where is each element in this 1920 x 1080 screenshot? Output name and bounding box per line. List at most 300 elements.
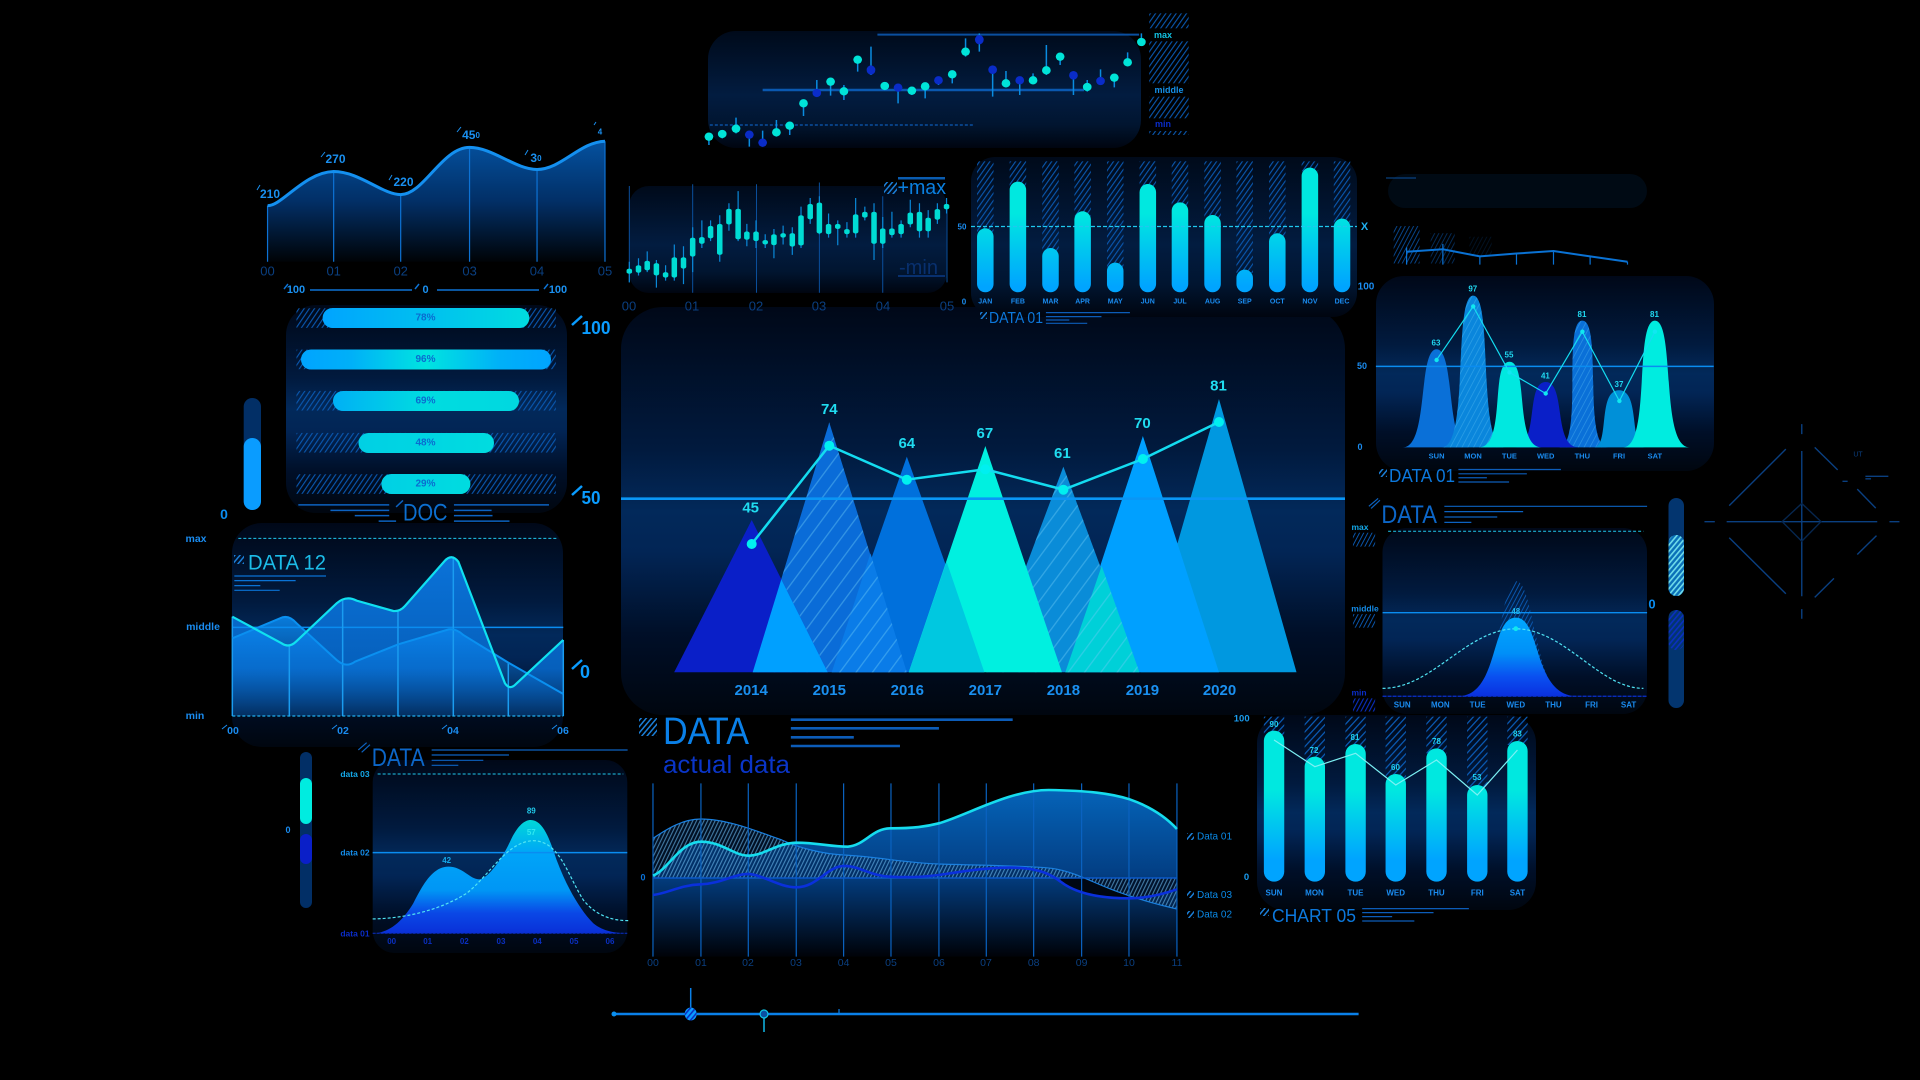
- bar 96%: [301, 350, 551, 370]
- values: 70: [1134, 415, 1151, 432]
- overlap 2015-2016: [832, 553, 907, 672]
- month labels: NOV: [1302, 298, 1318, 306]
- scale -100 0 100: [287, 284, 567, 296]
- panel: monthly bar chart: [958, 157, 1375, 327]
- years: 2020: [1203, 682, 1236, 699]
- peak WED: [1514, 382, 1579, 447]
- panel background: [971, 157, 1357, 317]
- values: 89: [527, 806, 536, 816]
- dashed curve: [373, 841, 628, 921]
- crosshair: [1704, 424, 1899, 619]
- month labels: SEP: [1238, 298, 1252, 306]
- day labels: SAT: [1621, 700, 1636, 710]
- peak THU hatching: [1558, 321, 1608, 447]
- month labels: JUN: [1141, 298, 1155, 306]
- values: [742, 378, 1227, 516]
- candle bodies: [627, 203, 949, 278]
- zero: 0: [640, 873, 646, 883]
- y labels: middle: [186, 621, 220, 633]
- base line: [1383, 695, 1647, 697]
- x axis labels: 01: [685, 298, 699, 314]
- day labels: THU: [1428, 888, 1445, 898]
- day labels: WED: [1506, 700, 1525, 710]
- day labels: SAT: [1510, 888, 1525, 898]
- heading lines: [358, 743, 628, 765]
- solid bell: [1458, 618, 1577, 696]
- level line: [1383, 612, 1647, 614]
- percentages: 48%: [415, 438, 436, 448]
- heading lines: [1362, 909, 1469, 921]
- overlap hatching: [832, 553, 907, 672]
- zero: 0: [285, 825, 291, 835]
- y labels: max: [1351, 522, 1369, 532]
- scale ticks: [572, 316, 582, 495]
- month labels: AUG: [1205, 298, 1221, 306]
- heading lines: [298, 500, 549, 521]
- values: 53: [1473, 773, 1482, 782]
- data points: [747, 417, 1224, 549]
- day labels: WED: [1386, 888, 1405, 898]
- values: 72: [1310, 746, 1319, 755]
- blue series: [232, 617, 563, 694]
- heading: DATA 12: DATA 12: [248, 552, 326, 574]
- grid verticals: [268, 141, 605, 262]
- values: 64: [898, 435, 916, 452]
- triangle 2020: [1140, 399, 1297, 672]
- x labels: 06: [557, 725, 569, 737]
- x labels: 07: [980, 957, 992, 969]
- years: 2015: [813, 682, 846, 699]
- x labels: 01: [695, 957, 707, 969]
- overlap 2018-2019: [1065, 566, 1139, 672]
- area fill: [268, 141, 605, 262]
- chart: smooth area line: [257, 122, 612, 296]
- outline data 02: [653, 819, 1177, 909]
- inner diamond: [1782, 503, 1821, 541]
- x labels: 03: [497, 937, 506, 946]
- top dashed: [1388, 530, 1643, 532]
- scale: 0: [1244, 872, 1249, 883]
- panel background: [373, 760, 627, 953]
- day labels: MON: [1464, 452, 1482, 460]
- right scale 100: 100: [582, 318, 610, 338]
- marker A: [685, 988, 697, 1020]
- panel background: [1382, 528, 1647, 714]
- hill chart: [358, 743, 628, 933]
- value labels: 210: [260, 187, 280, 201]
- scale -100 0 100: 100: [549, 284, 567, 296]
- x labels: [227, 725, 569, 737]
- value labels: 270: [326, 152, 346, 166]
- panel: bar chart 05: [1234, 714, 1536, 926]
- faint line chart: [1394, 226, 1627, 265]
- baseline: [232, 715, 563, 717]
- level line: [1376, 365, 1714, 367]
- hatching: [653, 819, 1177, 909]
- values: 60: [1391, 763, 1400, 772]
- panel: peaks chart: [1357, 276, 1714, 486]
- start dot: [612, 1012, 616, 1016]
- horizontal level: [621, 497, 1345, 500]
- x axis labels: 02: [393, 264, 408, 278]
- panel background: [621, 307, 1345, 715]
- right scale 50: 50: [582, 488, 600, 508]
- values: 61: [1054, 445, 1071, 462]
- x axis labels: 00: [622, 298, 636, 314]
- peak THU: [1558, 321, 1608, 447]
- gauge fill: [244, 438, 261, 510]
- data line: [1437, 306, 1655, 401]
- values: 90: [1270, 720, 1279, 729]
- values: 67: [977, 425, 993, 442]
- heading lines: [1046, 313, 1130, 323]
- axis values: [958, 221, 1375, 306]
- heading lines: [234, 576, 326, 590]
- curve: [268, 141, 605, 206]
- data points: [1434, 304, 1657, 403]
- dark blue candles: [745, 35, 1105, 147]
- x axis labels: 05: [598, 264, 612, 278]
- month labels: DEC: [1335, 298, 1349, 306]
- gauge zero: 0: [220, 506, 228, 522]
- day labels: TUE: [1348, 888, 1364, 898]
- value labels: 220: [394, 175, 414, 189]
- y labels: data 03: [340, 769, 370, 779]
- y labels: min: [1351, 688, 1367, 698]
- panel background: [1257, 715, 1536, 910]
- x labels: 11: [1172, 957, 1183, 969]
- triangle 2015: [753, 422, 907, 672]
- panel: dot candlestick chart: [705, 13, 1189, 148]
- peak SUN: [1403, 349, 1470, 447]
- years: 2019: [1126, 682, 1159, 699]
- axis values: 50: [958, 222, 967, 232]
- peak SAT: [1623, 321, 1690, 447]
- day labels: MON: [1305, 888, 1324, 898]
- x labels: 04: [533, 937, 542, 946]
- y labels: [185, 533, 220, 722]
- axis values: X: [1361, 221, 1369, 233]
- candle wicks: [629, 191, 947, 288]
- x labels: 08: [1028, 957, 1040, 969]
- value: 48: [1511, 607, 1521, 616]
- x axis labels: 00: [260, 264, 275, 278]
- x labels: [387, 937, 615, 946]
- day labels: FRI: [1585, 700, 1598, 710]
- x labels: 02: [460, 937, 469, 946]
- scale: 100: [1234, 714, 1250, 724]
- top dashed line: [378, 773, 623, 775]
- values: 97: [1468, 284, 1478, 294]
- values: 63: [1432, 338, 1441, 348]
- triangle 2016: [832, 457, 984, 672]
- hatched tracks: [1264, 717, 1528, 788]
- heading: DATA: DATA: [372, 744, 425, 772]
- values: [442, 806, 536, 865]
- month labels: JUL: [1173, 298, 1187, 306]
- day labels: THU: [1545, 700, 1562, 710]
- panel background: [708, 31, 1141, 148]
- scale -100 0 100: 100: [287, 284, 305, 296]
- bottom dashed line: [373, 932, 627, 934]
- month labels: MAR: [1043, 298, 1058, 306]
- day labels: FRI: [1471, 888, 1484, 898]
- value labels: 450: [462, 128, 480, 142]
- day labels: WED: [1537, 452, 1555, 460]
- short line: [1386, 177, 1416, 179]
- panel background: [286, 305, 567, 513]
- dark gap: [1061, 878, 1177, 898]
- month labels: [978, 298, 1349, 306]
- chart: DATA actual data: [639, 711, 1232, 969]
- hatched tracks: [977, 161, 1350, 273]
- hill: [373, 820, 627, 933]
- panel: area chart DATA 12: [185, 523, 590, 747]
- panel: hill chart DATA: [340, 743, 628, 953]
- faint empty panel: [1386, 174, 1647, 208]
- heading: DATA 01: DATA 01: [1389, 466, 1455, 486]
- left scale: [1357, 361, 1367, 452]
- zero: 0: [1648, 596, 1656, 612]
- x labels: 06: [933, 957, 945, 969]
- values: 42: [442, 856, 452, 865]
- line: [1407, 249, 1627, 262]
- cyan candles: [705, 38, 1146, 141]
- heading swatch: [980, 312, 987, 319]
- area under cyan line: [232, 557, 563, 716]
- legend swatches: [1187, 833, 1194, 918]
- legend: Data 02: [1197, 909, 1232, 921]
- bars and line: [1264, 717, 1528, 921]
- x labels: [647, 957, 1183, 969]
- heading: DATA 01: DATA 01: [989, 310, 1043, 327]
- bar 29%: [381, 474, 470, 494]
- x labels: 04: [447, 725, 459, 737]
- bars: [1264, 731, 1528, 882]
- track: [300, 752, 312, 908]
- label ticks: [222, 725, 557, 729]
- heading swatch: [639, 718, 657, 736]
- gauge: [244, 398, 261, 510]
- x axis labels: 03: [812, 298, 826, 314]
- area and series: [653, 720, 1177, 957]
- x labels: 06: [606, 937, 615, 946]
- hatched scale column: [1149, 13, 1189, 135]
- triangle 2019: [1065, 436, 1219, 672]
- min label: -min: [899, 257, 938, 279]
- legend: [1197, 831, 1232, 921]
- years: 2014: [735, 682, 769, 699]
- years: [735, 682, 1236, 699]
- values: [1270, 720, 1522, 782]
- cyan fill: [300, 778, 312, 824]
- percentages: 69%: [415, 396, 436, 406]
- x axis labels: 03: [462, 264, 477, 278]
- heading: DATA: DATA: [1381, 501, 1437, 529]
- marker B: [760, 1010, 768, 1032]
- month labels: OCT: [1270, 298, 1285, 306]
- years: 2016: [891, 682, 924, 699]
- heading swatch: [1260, 908, 1269, 916]
- x labels: 00: [387, 937, 397, 946]
- line: [1274, 740, 1517, 795]
- value labels: 4: [598, 128, 603, 136]
- radar target diagram: [1704, 424, 1899, 619]
- triangle 2015 hatching: [753, 422, 907, 672]
- heading lines: [1458, 470, 1561, 482]
- legend: Data 01: [1197, 831, 1232, 843]
- gauge lower: [1668, 610, 1684, 708]
- right zero: 0: [580, 662, 590, 682]
- legend: Data 03: [1197, 889, 1232, 901]
- grid verticals: [629, 183, 947, 293]
- values: 57: [527, 828, 536, 837]
- hatched swatches: [1394, 226, 1492, 264]
- values: 78: [1432, 737, 1441, 746]
- level line: [373, 852, 627, 854]
- y labels: max: [185, 533, 207, 545]
- values: 45: [742, 500, 759, 516]
- day labels: FRI: [1613, 452, 1625, 460]
- gauge: cyan and blue: [285, 752, 312, 908]
- bell chart: [1353, 498, 1647, 712]
- day labels: TUE: [1470, 700, 1486, 710]
- values: 81: [1210, 378, 1227, 394]
- chart: candlestick with max and min: [622, 177, 954, 314]
- timeline slider: [612, 988, 1359, 1032]
- y labels: data 02: [340, 848, 370, 858]
- values: 81: [1650, 310, 1659, 319]
- x labels: 01: [423, 937, 433, 946]
- outer diamond segments: [1729, 447, 1876, 597]
- max bar: [898, 177, 945, 180]
- tick: [838, 1009, 840, 1014]
- x axis labels: 01: [326, 264, 341, 278]
- x labels: 04: [838, 957, 850, 969]
- scale labels: max: [1154, 30, 1172, 40]
- panel: bell chart DATA: [1351, 498, 1684, 714]
- x axis labels: [622, 298, 954, 314]
- values: 81: [1351, 733, 1360, 742]
- x axis labels: 04: [530, 264, 544, 278]
- data point: [1513, 626, 1518, 631]
- triangle 2014: [674, 520, 828, 672]
- scale lines: [284, 284, 548, 290]
- scale labels: middle: [1154, 85, 1184, 95]
- value labels: [260, 128, 603, 201]
- heading swatch: [234, 555, 244, 564]
- x axis labels: [260, 264, 612, 278]
- y labels: data 01: [340, 929, 370, 939]
- gauge track: [244, 398, 261, 510]
- percentages: 29%: [415, 478, 436, 490]
- value labels: 30: [530, 151, 542, 165]
- x axis labels: 05: [940, 298, 954, 314]
- day labels: SUN: [1394, 700, 1411, 710]
- values: 74: [821, 401, 838, 418]
- day labels: [1394, 700, 1636, 710]
- panel background: [232, 523, 563, 747]
- side swatches: [1353, 533, 1375, 712]
- panel shape: [1388, 174, 1647, 208]
- month labels: JAN: [978, 298, 992, 306]
- label ticks: [257, 122, 596, 190]
- overlap 2016-2017: [909, 562, 984, 672]
- day labels: [1429, 452, 1663, 460]
- scale labels: [1154, 30, 1184, 129]
- y labels: [1351, 522, 1379, 698]
- data 01 curve: [653, 790, 1177, 876]
- charts: [232, 538, 563, 716]
- x labels: 05: [885, 957, 897, 969]
- day labels: MON: [1431, 700, 1450, 710]
- zero tick: [572, 660, 582, 669]
- years: 2018: [1047, 682, 1080, 699]
- y labels: middle: [1351, 604, 1379, 614]
- left scale: 50: [1357, 361, 1367, 371]
- peaks: [1376, 296, 1714, 447]
- scale labels: min: [1155, 119, 1171, 129]
- peak FRI: [1593, 390, 1645, 447]
- triangles: [674, 399, 1297, 672]
- values: 55: [1505, 350, 1514, 360]
- x labels: 10: [1123, 957, 1135, 969]
- x labels: 00: [647, 957, 659, 969]
- values: 83: [1513, 730, 1522, 738]
- heading: CHART 05: CHART 05: [1272, 905, 1356, 926]
- x axis labels: 04: [876, 298, 890, 314]
- percentages: 78%: [415, 312, 436, 324]
- x labels: 02: [337, 725, 349, 737]
- x labels: 02: [742, 957, 754, 969]
- verticals: [232, 557, 563, 716]
- y labels: min: [186, 710, 204, 722]
- axis values: 0: [962, 298, 967, 306]
- values: 41: [1541, 372, 1550, 380]
- data 03 curve: [653, 866, 1177, 898]
- x labels: 03: [790, 957, 802, 969]
- data line: [752, 422, 1219, 544]
- candle wicks: [709, 33, 1141, 147]
- area data 01: [653, 790, 1177, 957]
- panel background: [629, 186, 947, 293]
- panel: main triangle chart: [621, 307, 1345, 715]
- bars: [977, 168, 1350, 292]
- bar 48%: [358, 433, 494, 453]
- day labels: THU: [1575, 452, 1590, 460]
- hatched data 02: [653, 819, 1177, 909]
- values: 37: [1615, 380, 1624, 389]
- peak TUE: [1479, 362, 1542, 447]
- heading lines: [791, 720, 1013, 746]
- panel background: [1376, 276, 1714, 471]
- subheading: actual data: actual data: [663, 751, 790, 779]
- month labels: FEB: [1011, 298, 1025, 306]
- cyan series: [232, 557, 563, 687]
- overlap 2014-2015: [753, 579, 828, 672]
- dashed level line: [971, 226, 1357, 228]
- heading swatch: [1379, 469, 1387, 477]
- peak MON hatching: [1442, 296, 1505, 447]
- left scale: 0: [1357, 442, 1363, 452]
- scale: [1234, 714, 1250, 883]
- grid verticals: [653, 783, 1177, 957]
- min bar: [898, 275, 945, 277]
- scale -100 0 100: 0: [422, 284, 429, 296]
- peak MON: [1442, 296, 1505, 447]
- month labels: APR: [1075, 298, 1090, 306]
- bar 78%: [323, 308, 529, 328]
